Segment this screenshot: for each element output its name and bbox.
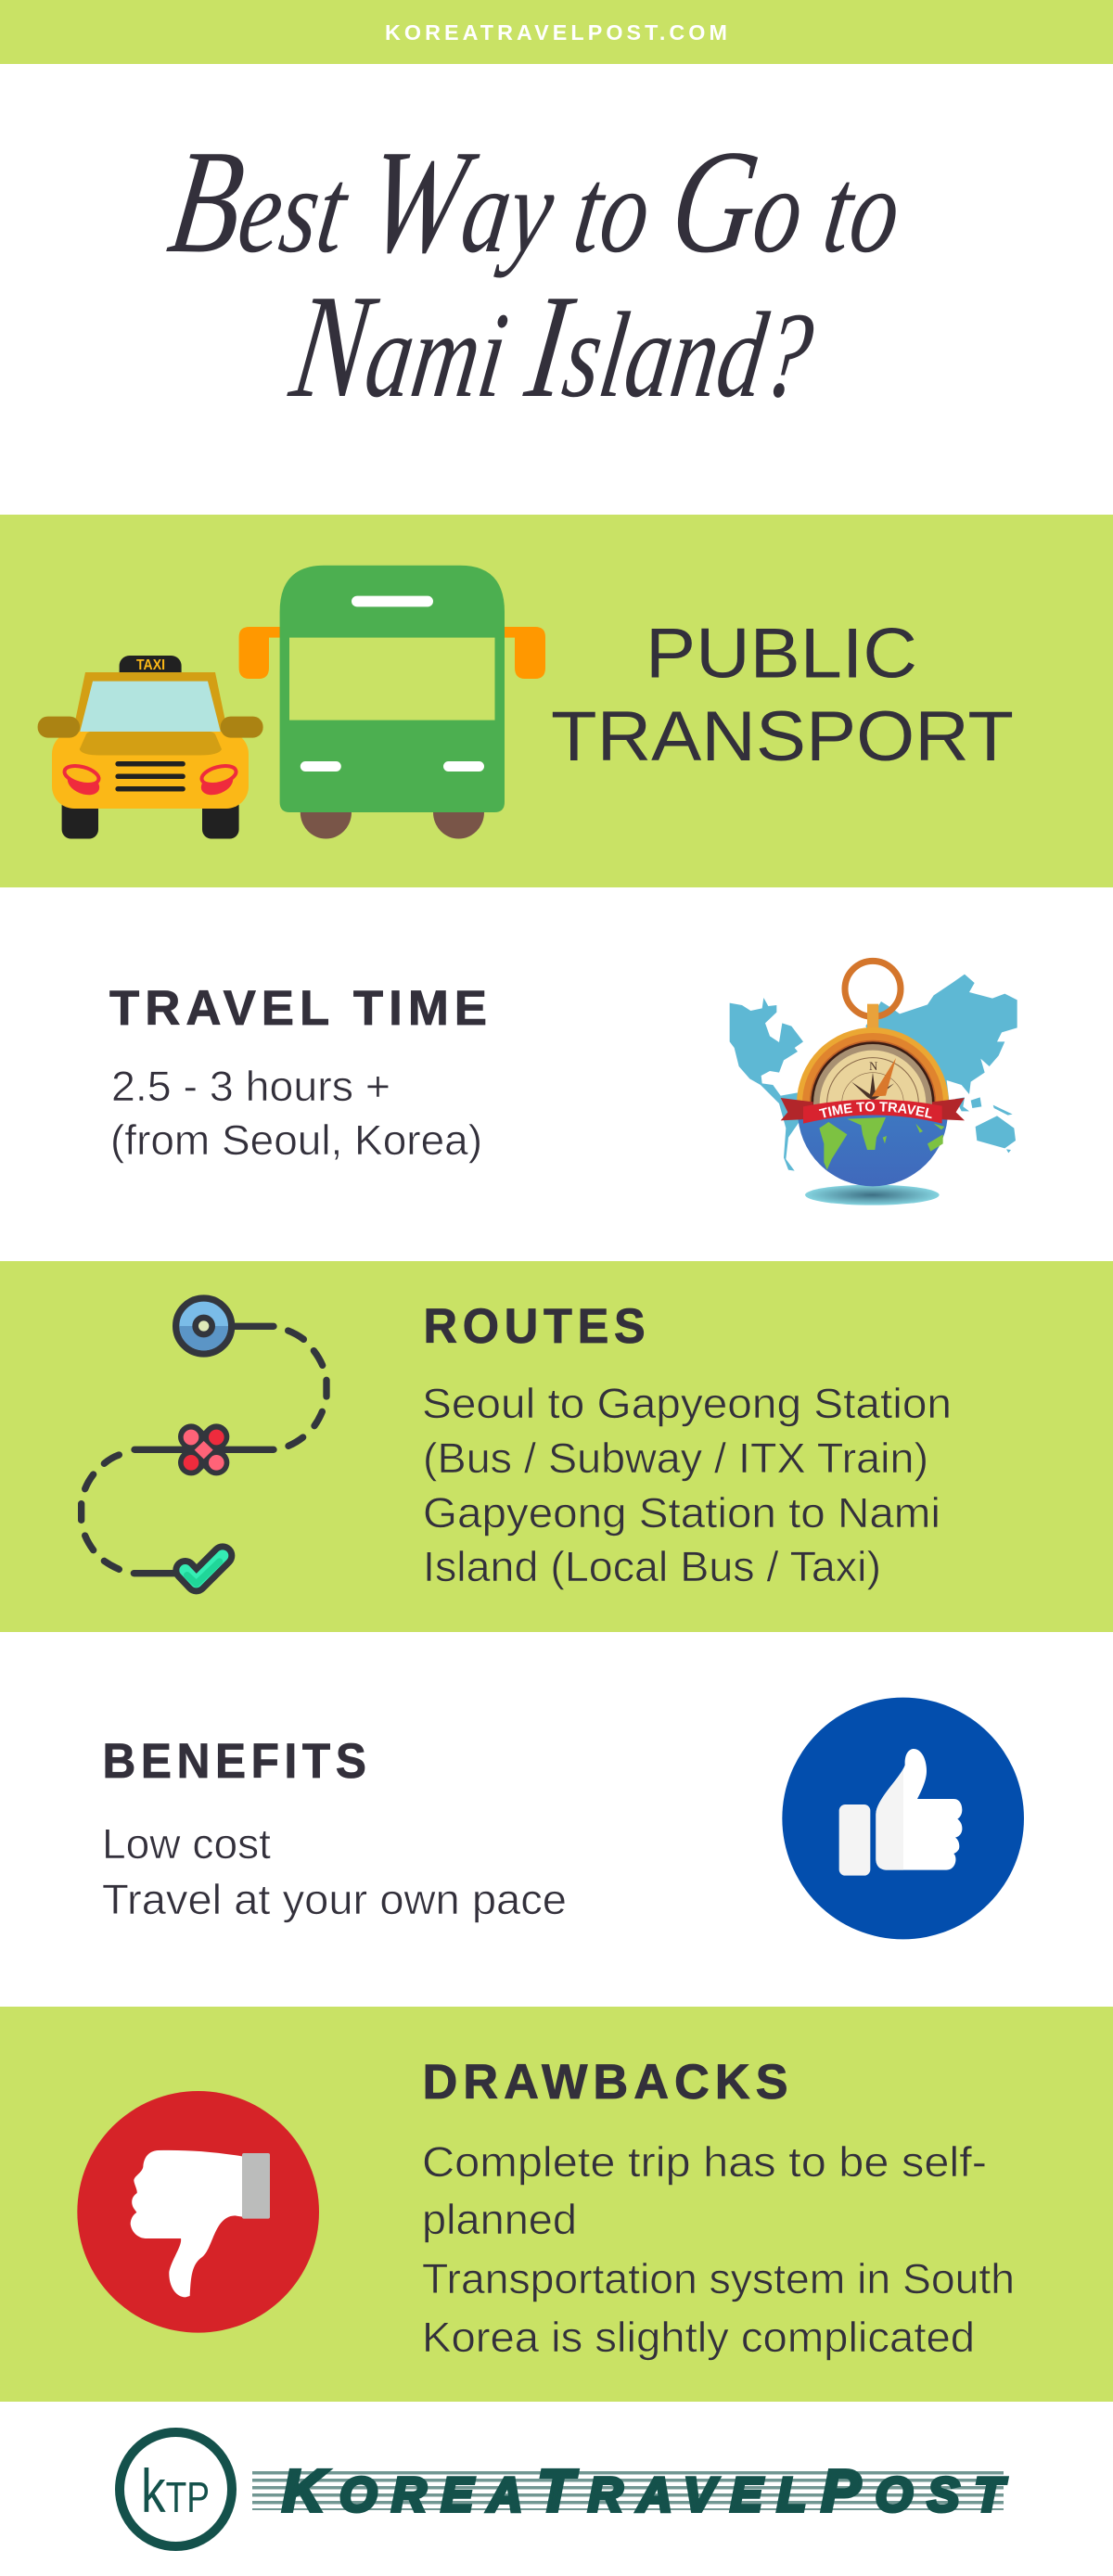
text: drawbacks list: Complete trip has to be self- [422, 2138, 987, 2186]
text: benefits list: Travel at your own pace [102, 1876, 567, 1923]
panel: travel time [109, 957, 1017, 1205]
icon: route path [82, 1298, 326, 1584]
ribbon [781, 1098, 965, 1124]
heading: public transport: PUBLIC [646, 614, 917, 694]
ribbon: TIME TO TRAVEL [818, 1102, 932, 1118]
heading: public transport [551, 614, 1014, 776]
panel: routes [0, 1261, 1113, 1632]
text: travel time value: (from Seoul, Korea) [110, 1116, 482, 1164]
footer logo [0, 2402, 1113, 2576]
heading: drawbacks: DRAWBACKS [423, 2055, 794, 2110]
heading: travel time: TRAVEL TIME [109, 981, 493, 1036]
logo wordmark: K OREAT RAVELP OST [282, 2457, 1007, 2524]
logo badge [120, 2432, 232, 2546]
heading: public transport: TRANSPORT [551, 697, 1014, 776]
title: Best Way to Go to [160, 120, 912, 284]
heading: routes: ROUTES [423, 1299, 651, 1354]
icon: taxi: TAXI [136, 657, 165, 673]
header band [0, 0, 1113, 64]
text: drawbacks list: Korea is slightly complicated [422, 2314, 975, 2361]
text: benefits list [102, 1820, 567, 1923]
globe [798, 1115, 948, 1187]
logo badge: kTP [141, 2456, 210, 2525]
text: travel time value: 2.5 - 3 hours + [111, 1063, 390, 1110]
heading: benefits: BENEFITS [102, 1734, 371, 1789]
route finish check [186, 1556, 223, 1584]
panel: public transport [0, 515, 1113, 887]
text: travel time value [110, 1063, 482, 1164]
title [160, 120, 912, 428]
panel: drawbacks [0, 2007, 1113, 2402]
text: routes list: Seoul to Gapyeong Station [422, 1380, 952, 1427]
website name: KOREATRAVELPOST.COM [385, 20, 731, 45]
compass [797, 1027, 949, 1105]
panel: benefits [103, 1697, 1024, 1940]
icon: compass and globe [729, 957, 1017, 1205]
text: routes list: (Bus / Subway / ITX Train) [423, 1435, 928, 1482]
icon: thumbs down [77, 2091, 319, 2333]
icon: taxi [38, 656, 263, 838]
text: routes list: Gapyeong Station to Nami [423, 1489, 940, 1537]
text: drawbacks list: planned [422, 2196, 577, 2243]
text: routes list: Island (Local Bus / Taxi) [423, 1543, 881, 1590]
text: drawbacks list: Transportation system in South [422, 2255, 1015, 2302]
icon: bus [239, 566, 545, 839]
text: routes list [422, 1380, 952, 1590]
route start marker [176, 1298, 232, 1354]
world map [730, 975, 1017, 1171]
title: Nami Island? [282, 264, 824, 428]
text: benefits list: Low cost [102, 1820, 271, 1868]
icon: thumbs up [782, 1698, 1024, 1939]
compass: N [869, 1060, 877, 1073]
text: drawbacks list [422, 2138, 1015, 2361]
route obstacle marker [184, 1430, 224, 1471]
